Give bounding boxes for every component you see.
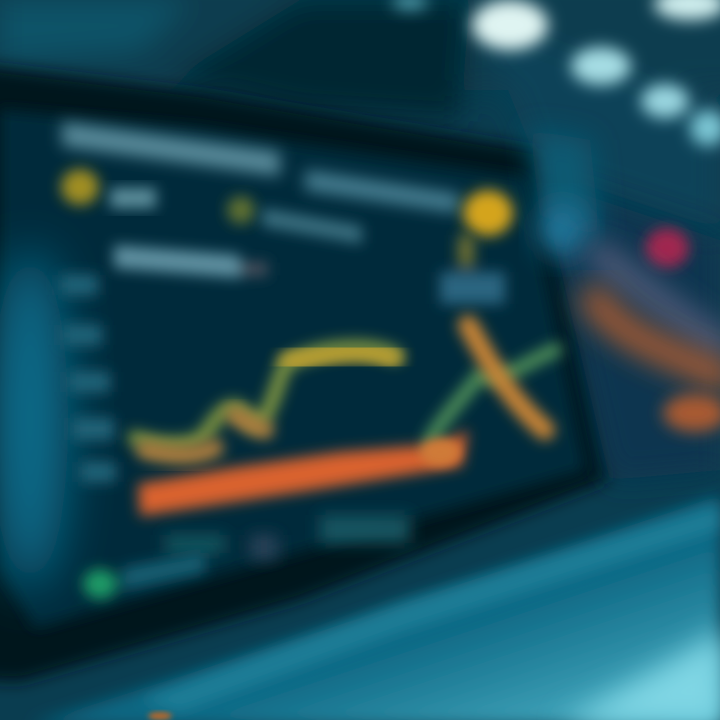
right chart orange block [663, 394, 720, 432]
icon: red marker [645, 228, 689, 268]
subheading smudge [114, 245, 268, 278]
icon: bright yellow marker [463, 190, 513, 236]
desk surface [30, 495, 720, 720]
rising green line [430, 350, 555, 440]
ceiling lights [392, 0, 720, 146]
legend label two [262, 208, 362, 244]
monitor frame [0, 65, 610, 682]
legend markers [61, 169, 513, 244]
icon: green marker [83, 552, 205, 599]
orange area band [138, 430, 468, 516]
orange end dot [420, 438, 460, 466]
right chart mauve line [600, 255, 720, 345]
right chart [538, 204, 720, 432]
right dark region [540, 180, 720, 480]
chart: lines [135, 325, 555, 516]
yellow-green line [135, 348, 395, 444]
x-axis labels [165, 515, 410, 559]
right chart line [595, 300, 720, 375]
legend label [110, 188, 156, 208]
title text smudge [62, 122, 460, 213]
bright segment [290, 352, 392, 362]
orange lower line [145, 415, 265, 455]
second screen at right [530, 130, 600, 240]
icon: yellow marker left [61, 169, 99, 205]
y-axis labels [60, 275, 116, 482]
icon: olive marker [227, 196, 255, 224]
falling orange line [468, 325, 545, 430]
screen left glow [0, 250, 68, 590]
data label near peak [440, 235, 505, 304]
blue smudge [538, 204, 586, 256]
main screen [0, 110, 585, 628]
ceiling [0, 0, 720, 230]
